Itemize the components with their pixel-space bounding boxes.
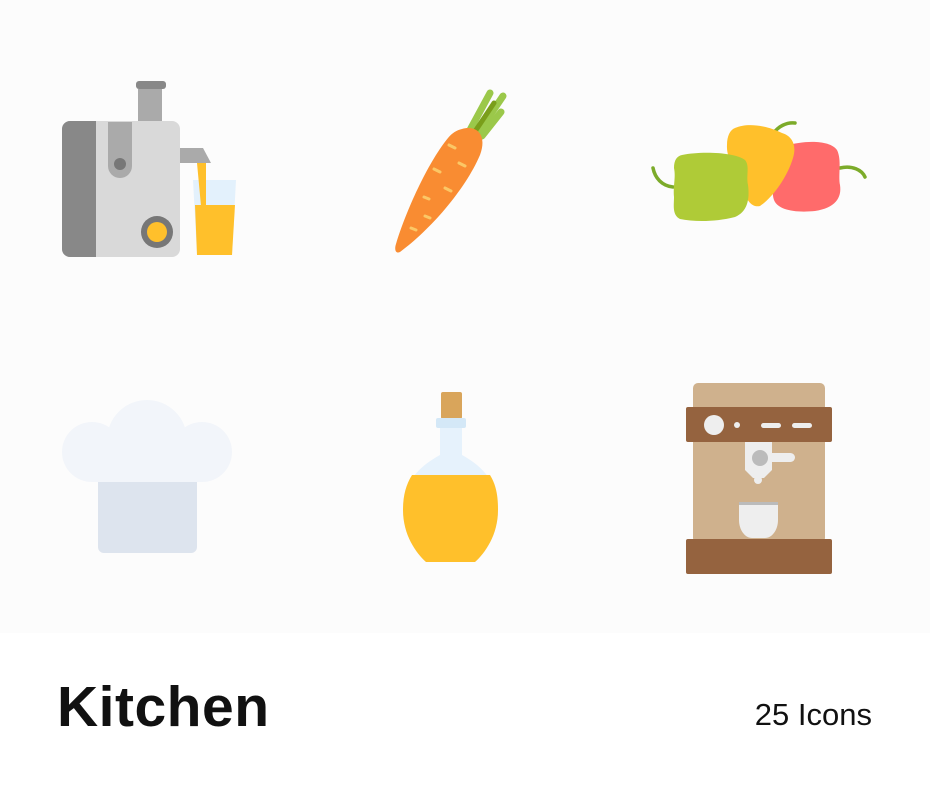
title: Kitchen (57, 675, 270, 739)
icon: oil bottle (403, 392, 498, 562)
icon count: 25 Icons (755, 697, 872, 732)
icon: chef hat (62, 400, 232, 553)
icon: coffee machine (686, 383, 832, 574)
icon: carrot (395, 93, 503, 253)
icon: juicer (62, 81, 236, 257)
icon: peppers (653, 123, 865, 221)
